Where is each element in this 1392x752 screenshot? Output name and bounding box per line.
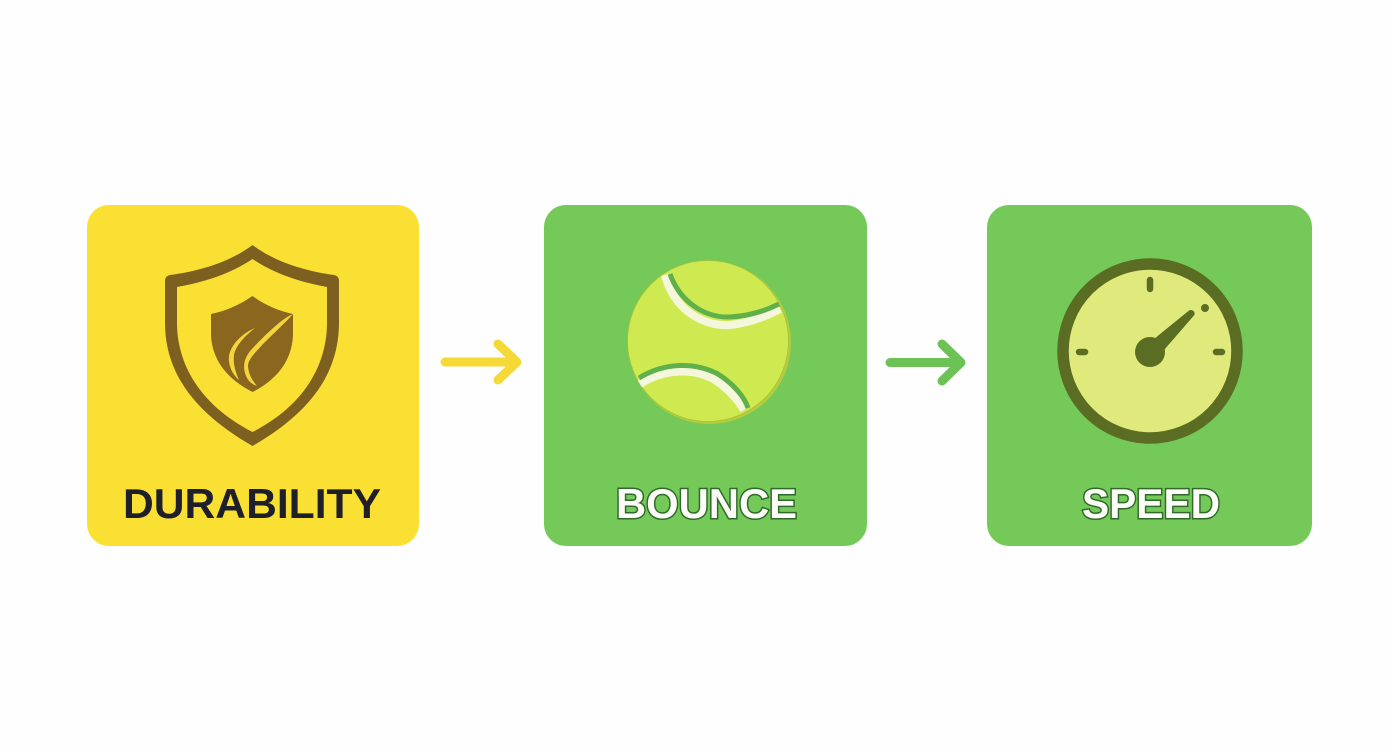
panel: bounce <box>544 205 867 546</box>
arrow: durability to bounce <box>445 344 517 380</box>
label: bounce: BOUNCE <box>616 480 797 527</box>
gauge ticks <box>1079 280 1222 352</box>
speed card background <box>987 205 1312 546</box>
ball shadow edge <box>628 261 791 424</box>
arrow: bounce to speed <box>890 344 961 381</box>
icon: tennis ball <box>628 260 791 424</box>
upper seam <box>665 274 780 325</box>
gauge dot <box>1201 304 1209 312</box>
gauge hub <box>1135 337 1165 367</box>
icon: shield <box>165 245 339 446</box>
lower seam <box>639 365 748 410</box>
bounce card background <box>544 205 867 546</box>
panel: durability <box>87 205 419 546</box>
gauge needle <box>1154 310 1195 350</box>
gauge dial <box>1063 264 1237 438</box>
label: speed: SPEED <box>1082 480 1220 527</box>
inner shield <box>211 296 293 392</box>
inner shield highlight strokes <box>244 314 293 386</box>
panel: speed <box>987 205 1312 546</box>
icon: speedometer <box>1063 264 1237 438</box>
outer shield outline <box>165 245 339 446</box>
ball body <box>628 260 788 422</box>
durability card background <box>87 205 419 546</box>
label: durability: DURABILITY <box>123 480 381 527</box>
